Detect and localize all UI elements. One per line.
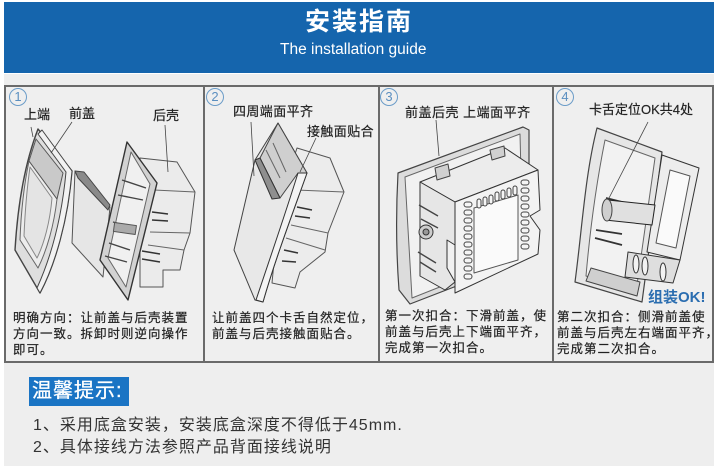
panel: step 3 frame bbox=[378, 85, 554, 363]
step number 2: 2 bbox=[211, 89, 219, 104]
step 4 description: 前盖与后壳左右端面平齐， bbox=[557, 326, 719, 340]
step number 4 bbox=[556, 88, 574, 106]
panel: step 4 frame bbox=[552, 85, 714, 363]
step 3 description: 完成第一次扣合。 bbox=[385, 341, 493, 355]
label: edges flush: 四周端面平齐 bbox=[233, 104, 313, 119]
subtitle: The installation guide bbox=[280, 41, 426, 58]
step number 3 bbox=[380, 88, 398, 106]
label: top edges flush: 前盖后壳 上端面平齐 bbox=[405, 105, 531, 120]
panel: step 2 frame bbox=[203, 85, 380, 363]
step number 1: 1 bbox=[14, 89, 22, 104]
tips list bbox=[33, 416, 403, 456]
step 4 description: 完成第二次扣合。 bbox=[557, 342, 665, 356]
step 4 description bbox=[557, 310, 719, 356]
step 2 description: 前盖与后壳接触面贴合。 bbox=[212, 327, 361, 341]
header banner bbox=[4, 2, 714, 73]
title: 安装指南 bbox=[305, 8, 413, 36]
step 1 description: 即可。 bbox=[13, 343, 54, 357]
step 1 description bbox=[13, 311, 189, 357]
step 4 description: 第二次扣合：侧滑前盖使 bbox=[557, 310, 706, 324]
label: front cover: 前盖 bbox=[69, 106, 95, 121]
step 3 description: 前盖与后壳上下端面平齐， bbox=[385, 325, 547, 339]
step 3 description: 第一次扣合：下滑前盖，使 bbox=[385, 309, 547, 323]
label: contact surface: 接触面贴合 bbox=[307, 124, 374, 139]
illustration: step 1 exploded view bbox=[15, 122, 195, 300]
step 3 description bbox=[385, 309, 547, 355]
step number 2 bbox=[206, 88, 224, 106]
callout: assembly OK: 组装OK! bbox=[648, 289, 706, 306]
tips heading bbox=[29, 377, 129, 406]
step number 1 bbox=[9, 88, 27, 106]
step 1 description: 明确方向：让前盖与后壳装置 bbox=[13, 311, 189, 325]
tips list: 1、采用底盒安装，安装底盒深度不得低于45mm. bbox=[33, 417, 403, 434]
illustration: step 3 rear view bbox=[397, 120, 540, 304]
label: clips located: 卡舌定位OK共4处 bbox=[589, 102, 693, 117]
step number 4: 4 bbox=[561, 89, 569, 104]
label: top end: 上端 bbox=[24, 107, 50, 122]
tips heading: 温馨提示: bbox=[32, 380, 123, 402]
illustration: step 2 cover and shell bbox=[234, 122, 344, 302]
label: back shell: 后壳 bbox=[153, 108, 179, 123]
step 1 description: 方向一致。拆卸时则逆向操作 bbox=[13, 327, 189, 341]
tips list: 2、具体接线方法参照产品背面接线说明 bbox=[33, 439, 332, 456]
illustration: step 4 side view bbox=[575, 122, 699, 302]
step number 3: 3 bbox=[385, 89, 393, 104]
step 2 description bbox=[212, 311, 374, 341]
panel: step 1 frame bbox=[4, 85, 205, 363]
step 2 description: 让前盖四个卡舌自然定位， bbox=[212, 311, 374, 325]
